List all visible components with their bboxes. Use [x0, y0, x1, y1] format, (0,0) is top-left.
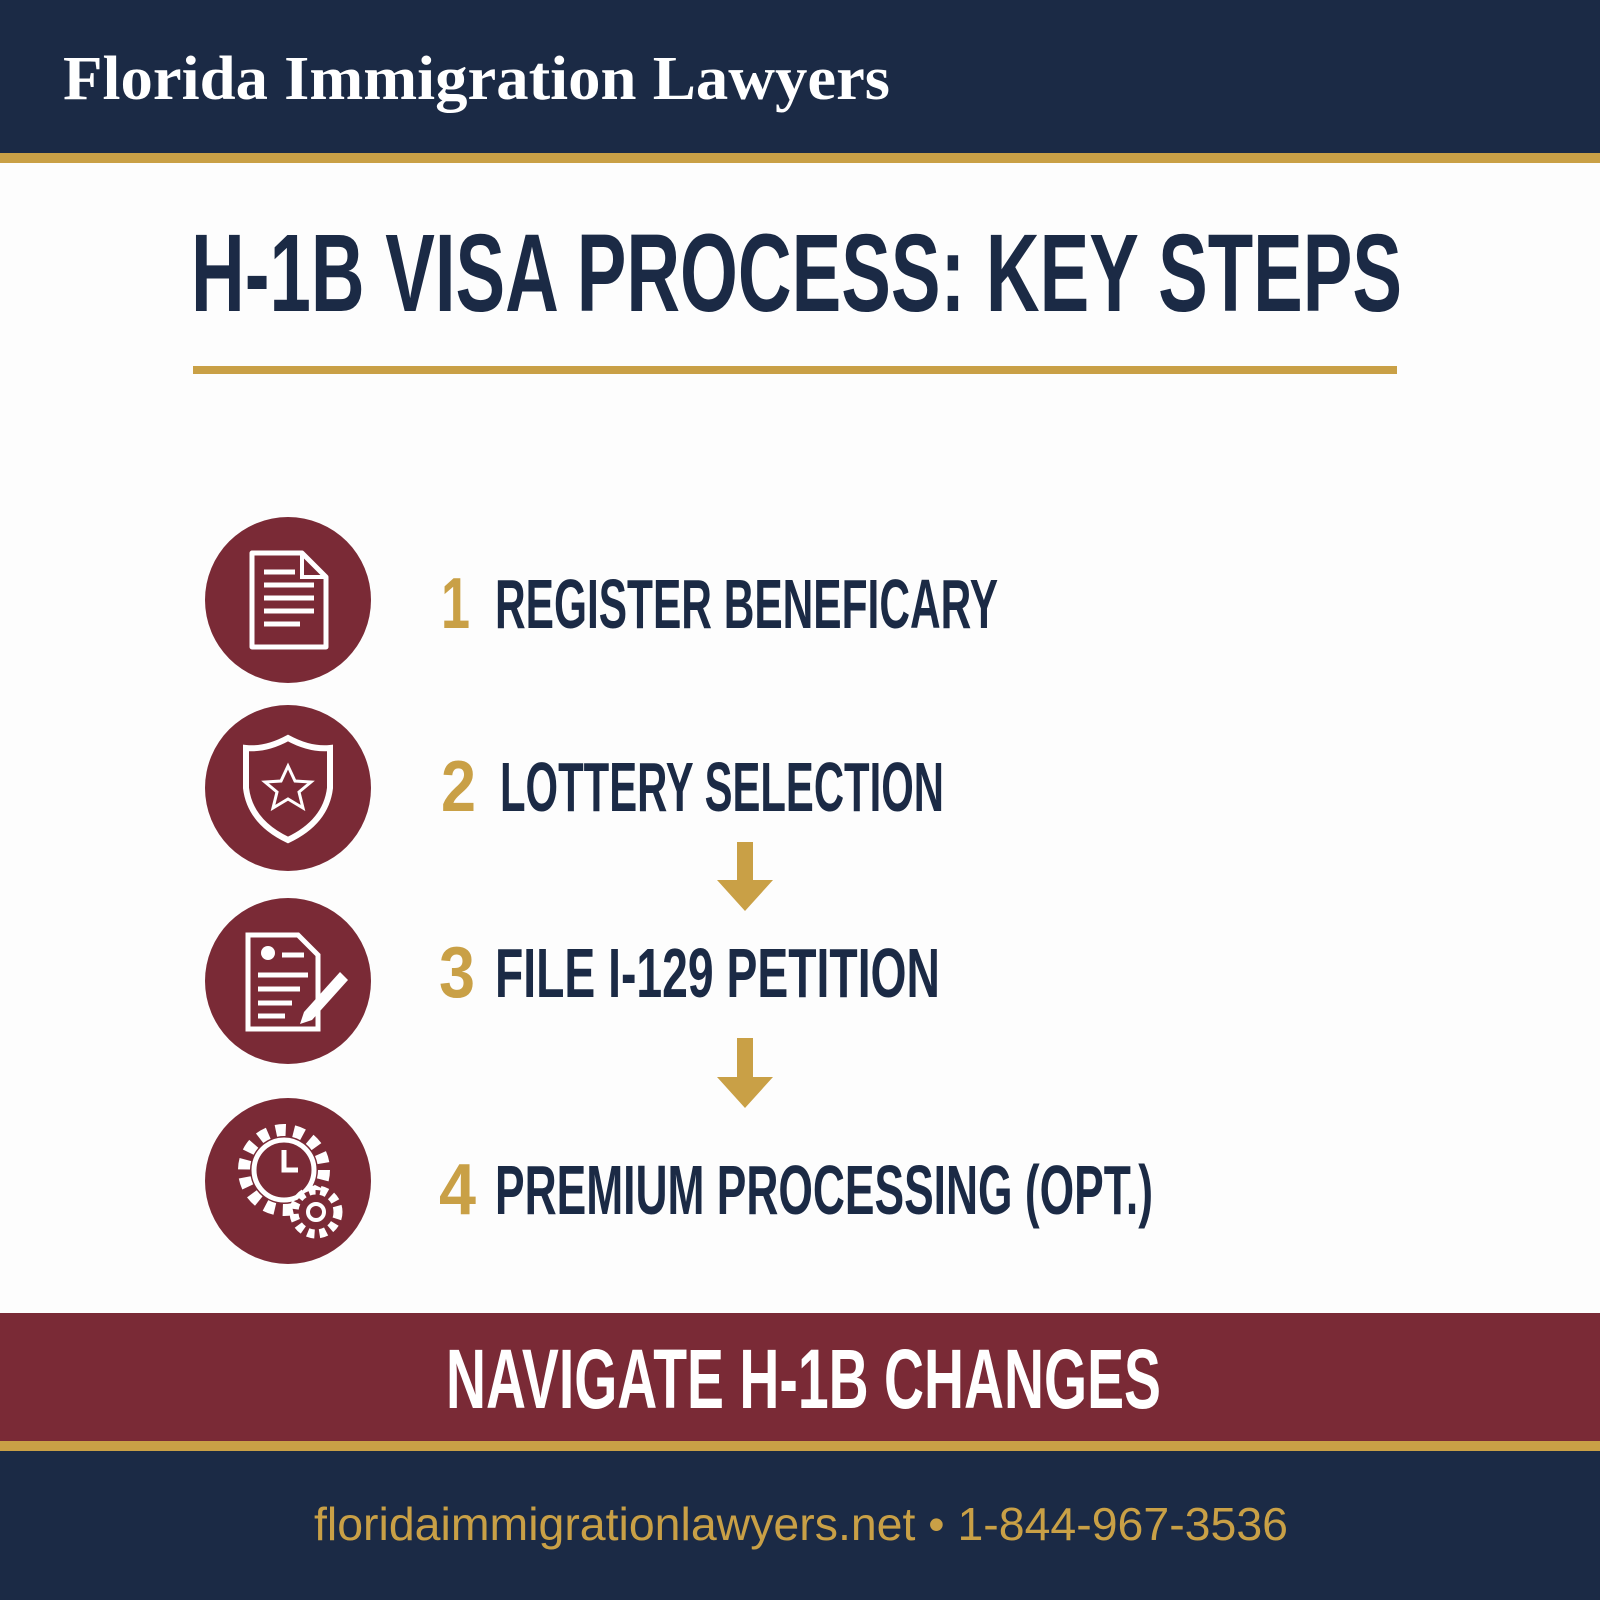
step 1 label: 1 — [441, 564, 470, 644]
step 4: PREMIUM PROCESSING (OPT.) — [495, 1151, 1153, 1229]
icon: document — [205, 517, 371, 683]
title underline — [193, 366, 1397, 374]
footer — [0, 1441, 1600, 1600]
arrow 1 — [717, 842, 773, 911]
step 3 — [205, 898, 940, 1064]
banner: navigate — [0, 1313, 1600, 1441]
step 2 — [205, 705, 944, 871]
step 3: FILE I-129 PETITION — [495, 934, 940, 1012]
footer: floridaimmigrationlawyers.net • 1-844-967-3536 — [314, 1498, 1288, 1550]
step 1 — [205, 517, 998, 683]
step 4 — [205, 1098, 1153, 1264]
icon: petition with pen — [205, 898, 371, 1064]
step 2: LOTTERY SELECTION — [500, 748, 944, 826]
header text: Florida Immigration Lawyers — [63, 45, 890, 113]
step 4 label: 4 — [439, 1150, 476, 1230]
banner: navigate: NAVIGATE H-1B CHANGES — [446, 1332, 1161, 1426]
step 1: REGISTER BENEFICARY — [495, 565, 998, 643]
header bar — [0, 0, 1600, 163]
arrow 2 — [717, 1038, 773, 1108]
step 3 label: 3 — [439, 933, 475, 1013]
icon: shield star — [205, 705, 371, 871]
icon: clock gears — [205, 1098, 371, 1264]
step 2 label: 2 — [441, 747, 476, 827]
